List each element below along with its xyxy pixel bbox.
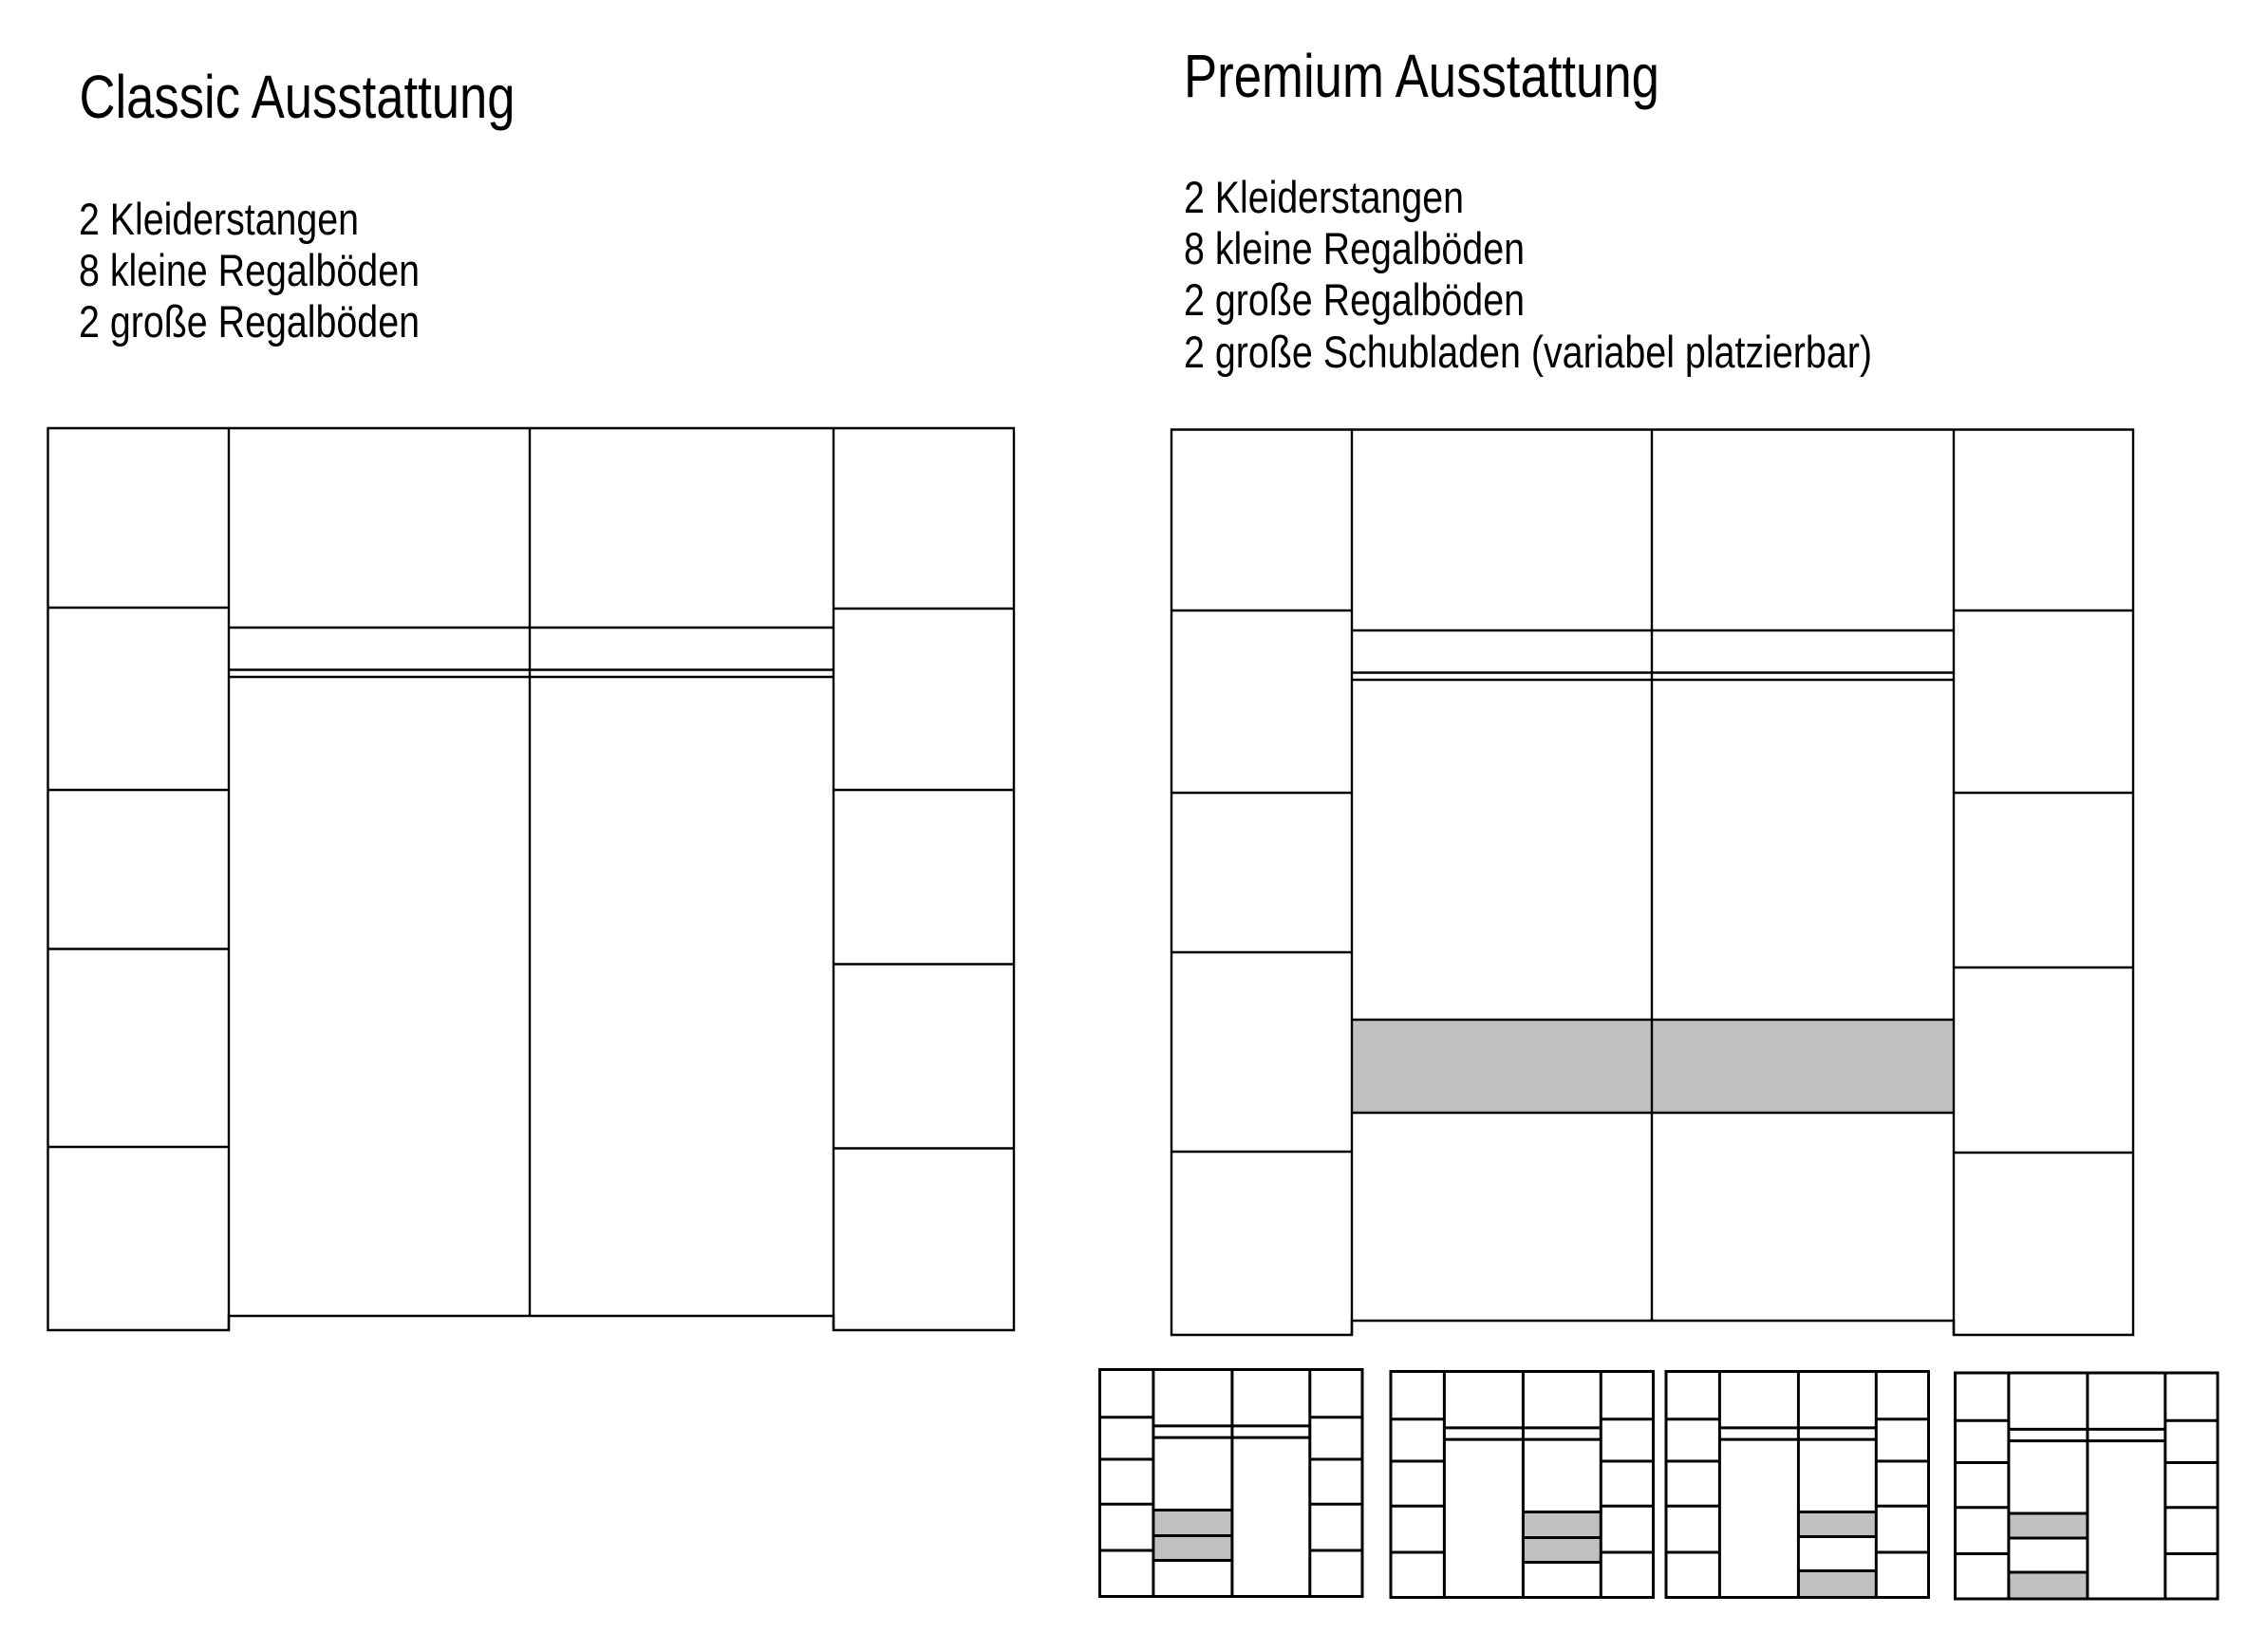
text block: Classic features: 8 kleine Regalböden (79, 245, 420, 295)
text block: Classic features: 2 große Regalböden (79, 296, 420, 347)
thumbnail: drawers stacked in left section (1099, 1369, 1362, 1597)
diagram: Premium wardrobe (1171, 429, 2133, 1335)
text block: Classic features: 2 Kleiderstangen (79, 194, 359, 244)
thumbnail: drawers stacked in right section (1391, 1371, 1654, 1597)
text block: Premium features: 2 Kleiderstangen (1184, 172, 1464, 222)
text block: Premium features: 2 große Regalböden (1184, 274, 1525, 325)
text block: Premium features (1184, 172, 1872, 377)
title: Premium Ausstattung: Premium Ausstattung (1184, 42, 1659, 110)
text block: Classic features (79, 194, 420, 347)
text block: Premium features: 8 kleine Regalböden (1184, 223, 1525, 273)
diagram: Classic wardrobe (47, 428, 1014, 1330)
thumbnail: drawers separated in left section (1956, 1373, 2218, 1599)
thumbnail: drawers separated in right section (1666, 1371, 1929, 1597)
text block: Premium features: 2 große Schubladen (variabel platzierbar) (1184, 327, 1872, 377)
title: Classic Ausstattung: Classic Ausstattung (80, 63, 515, 131)
wardrobe lines (1171, 429, 2133, 1335)
drawers: two large grey drawers (1352, 1020, 1954, 1113)
